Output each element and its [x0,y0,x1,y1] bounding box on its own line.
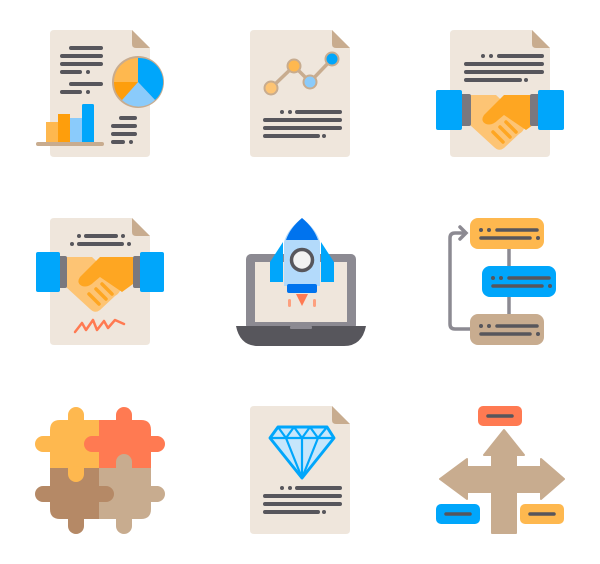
icon: document with line graph [250,30,350,157]
icon: agreement document with handshake [436,30,564,157]
icon: report with charts [36,30,164,157]
icon: rocket launching from laptop [236,218,366,346]
icon: document with diamond [250,406,350,534]
icon: flowchart [450,218,556,345]
icon: direction arrows [436,406,564,533]
icon: signed contract handshake [36,218,164,345]
icon: puzzle [35,407,165,534]
